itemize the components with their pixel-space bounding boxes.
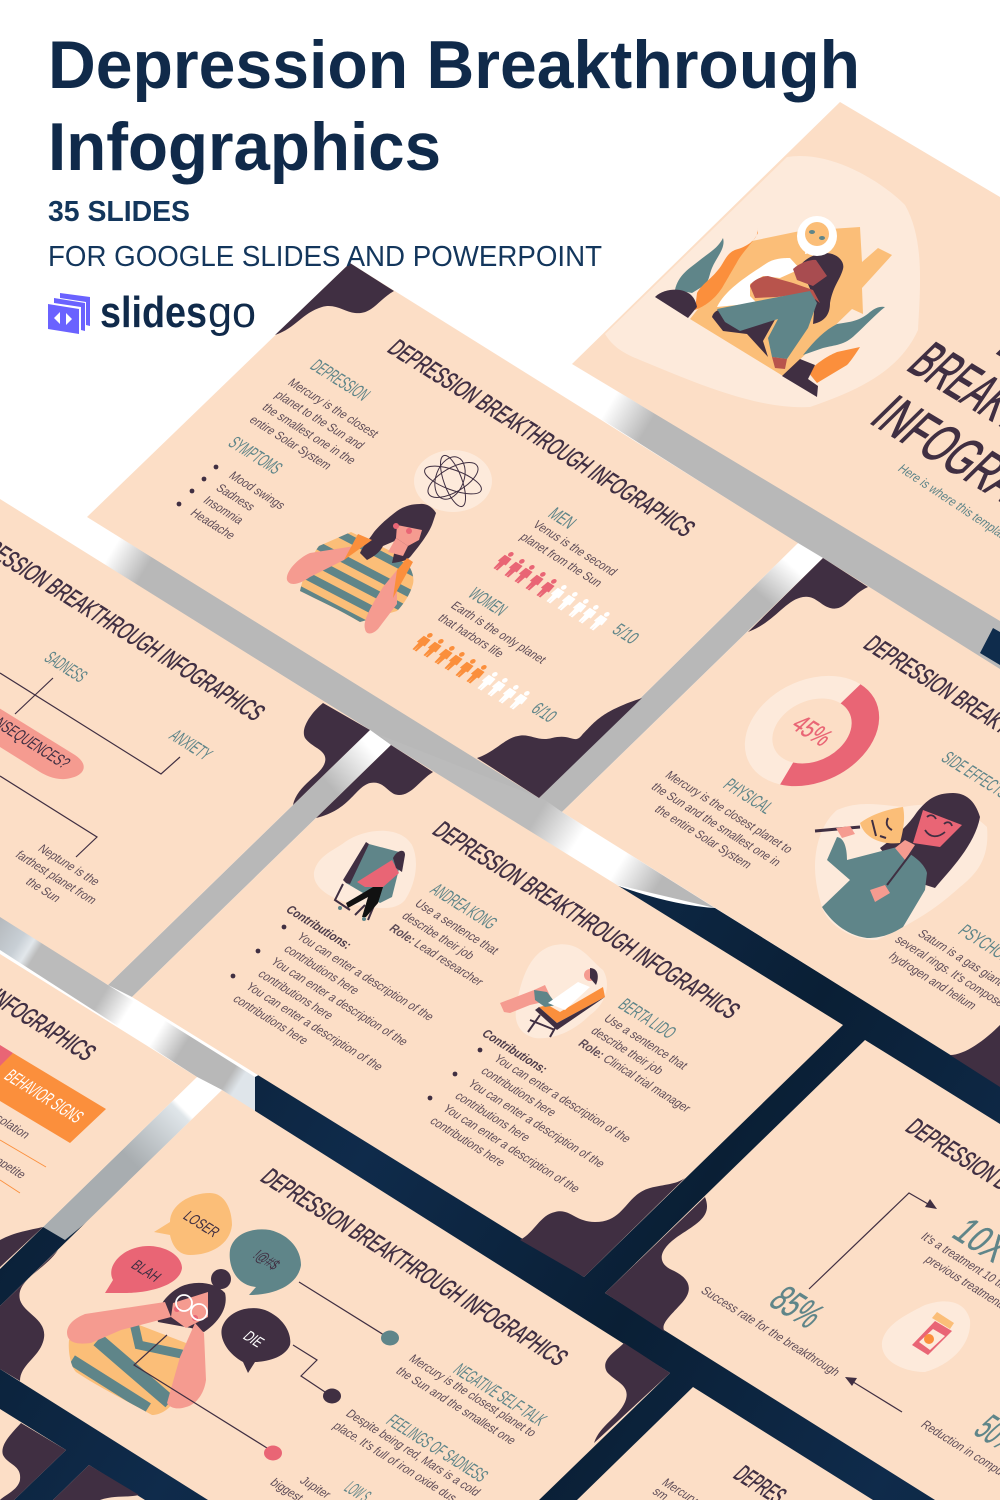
speech bubble: blah (105, 1246, 182, 1293)
text: neptune description: the Sun (23, 875, 64, 905)
stat: 85%: 85% (761, 1279, 833, 1335)
title second line: Infographics (48, 109, 441, 185)
shadow band between slides B and C (380, 735, 715, 908)
bullet list: symptoms: Insomnia (200, 493, 248, 527)
subtitle: slide count: 35 SLIDES (48, 196, 190, 228)
text: success rate: Success rate for the breakthrough (698, 1284, 844, 1379)
icon: tangled thought bubble (414, 450, 492, 512)
heading: women: WOMEN (464, 584, 512, 619)
shadow band below slide A (0, 500, 540, 798)
illustration: woman holding a mask (815, 793, 987, 940)
text: psychological description: hydrogen and helium (886, 949, 980, 1012)
panel: slide C team (132, 745, 843, 1277)
icon: slidesgo logo (48, 293, 90, 334)
node: pink dot (264, 1446, 282, 1460)
wave: bottom right (0, 1227, 43, 1267)
heading: negative self-talk: NEGATIVE SELF-TALK (449, 1360, 551, 1429)
text: Andrea contributions: Contributions: (283, 903, 355, 952)
speech bubble: loser (154, 1193, 232, 1255)
speech bubble: loser: LOSER (179, 1209, 223, 1241)
text: neptune description: farthest planet from (12, 848, 100, 907)
node: dark dot (323, 1388, 341, 1404)
stat: 5/10: 5/10 (608, 620, 644, 648)
donut chart: 45%: 45% (785, 711, 839, 752)
text: Berta description: Role: Clinical trial manager (575, 1036, 694, 1115)
panel: slide J bottom left (53, 1465, 145, 1500)
panel: cover slide (572, 102, 1000, 621)
title: Depression Breakthrough (48, 27, 860, 103)
text: Berta contributions: contributions here (478, 1064, 560, 1119)
text: Berta contributions: You can enter a description of the (465, 1077, 609, 1170)
heading: men: MEN (544, 504, 581, 532)
speech bubble: die (221, 1308, 290, 1373)
wave: bottom right (520, 1178, 685, 1277)
logo wordmark: go (208, 288, 256, 337)
illustration: stressed woman holding her head (67, 1269, 231, 1415)
text: Berta contributions (427, 1027, 635, 1208)
node: teal dot (381, 1330, 399, 1346)
text: Berta description: Use a sentence that (601, 1012, 691, 1072)
wave: bottom right (950, 1025, 1000, 1087)
text: Berta contributions: You can enter a description of the (491, 1052, 635, 1145)
panel: slide B physical and psychological (562, 558, 1000, 1087)
text: Berta description: describe their job (588, 1024, 667, 1077)
bullet list: symptoms: Mood swings (226, 469, 289, 512)
heading: depression: DEPRESSION (306, 356, 375, 404)
heading: slide title: DEPRESSION BREAKTHROUGH INFOGRAPHICS (381, 336, 700, 542)
text: Andrea contributions (230, 903, 438, 1086)
navy wedge at upper right (980, 628, 1000, 665)
heading: symptoms: SYMPTOMS (224, 433, 287, 478)
text: Andrea contributions: contributions here (255, 967, 337, 1022)
heading: physical: PHYSICAL (719, 775, 778, 817)
text: Berta contributions: contributions here (427, 1114, 509, 1169)
wave: top left (748, 558, 868, 632)
text: Andrea contributions: You can enter a description of the (243, 980, 387, 1073)
wave: right corner (594, 1343, 670, 1443)
heading: Berta Lido: BERTA LIDO (614, 995, 681, 1042)
heading: slide title: DEPRESSION BREAKTHROUGH INFOGRAPHICS (426, 818, 745, 1024)
text: neptune description: Neptune is the (35, 842, 104, 888)
icon: pill bottle (882, 1301, 970, 1372)
bullet list: symptoms (177, 465, 289, 549)
text: Berta contributions: Contributions: (479, 1027, 551, 1076)
arrow: to 85% (845, 1377, 902, 1412)
text: Andrea contributions: contributions here (281, 942, 363, 997)
text: depression description: the smallest one in the (259, 400, 360, 467)
pictogram chart: women 6 of 10 (410, 631, 533, 711)
illustration: Andrea Kong in a chair (314, 831, 416, 921)
panel: slide F consequences (0, 499, 370, 985)
speech bubble: symbols (230, 1229, 301, 1295)
speech bubble: die: DIE (239, 1329, 267, 1351)
illustration: sad woman in striped sweater (286, 504, 436, 634)
wave: top left (316, 745, 433, 818)
stat: 6/10: 6/10 (527, 699, 562, 726)
navy background region (0, 884, 1000, 1500)
text: feelings description: Despite being red, Mars is a cold (343, 1407, 484, 1499)
panel: slide K bottom left corner (0, 1409, 66, 1500)
text: physical description: Mercury is the closest planet to (662, 768, 796, 856)
text: Andrea description: describe their job (399, 909, 478, 962)
wave: top left (53, 1465, 139, 1500)
shadow band right of slide A (539, 543, 823, 812)
text: men description: Venus is the second (530, 518, 621, 578)
shadow band under cover slide (572, 364, 1000, 670)
shadow band between slides F and C (108, 730, 391, 997)
text: physical description: the entire Solar System (651, 802, 756, 871)
text: Andrea description: Use a sentence that (412, 897, 502, 957)
text: women description: Earth is the only planet (448, 599, 550, 666)
text: depression description: Mercury is the closest (285, 376, 382, 440)
orange header bar (0, 1053, 106, 1143)
bullet list: symptoms: Headache (187, 506, 239, 542)
text: negative self-talk description: Mercury is the closest planet to (406, 1352, 540, 1439)
bullet list: symptoms: Sadness (213, 481, 259, 514)
heading: anxiety: ANXIETY (165, 726, 217, 764)
text: depression description: entire Solar System (246, 413, 335, 472)
panel: slide D negative self-talk (0, 1090, 670, 1500)
subtitle: platforms: FOR GOOGLE SLIDES AND POWERPOINT (48, 241, 602, 273)
heading: Andrea Kong: ANDREA KONG (426, 880, 502, 933)
shadow band between slides E and D (43, 1077, 222, 1250)
connector lines (0, 673, 180, 857)
wave: left corner (0, 1250, 58, 1381)
heading: sadness: SADNESS (40, 648, 92, 686)
pictogram chart: men 5 of 10 (491, 550, 613, 632)
illustration: woman sitting in front of a house (655, 216, 892, 397)
text: Berta contributions: contributions here (452, 1089, 534, 1144)
text: physical description: the Sun and the smallest one in (648, 780, 785, 869)
shadow band below slide F (0, 915, 255, 1112)
pill: consequences (0, 690, 84, 779)
wave: top right (293, 703, 370, 805)
light blob behind cover illustration (605, 156, 920, 407)
panel: slide E behavior signs (0, 860, 197, 1269)
text: Berta contributions: You can enter a description of the (440, 1102, 584, 1195)
wave: top right (0, 1423, 66, 1500)
wave: bottom right (477, 698, 642, 798)
text: Andrea contributions: You can enter a description of the (294, 930, 438, 1023)
logo wordmark: slides (100, 288, 207, 337)
text: negative self-talk description: the Sun and the smallest one (393, 1364, 520, 1447)
pink header bar (0, 1045, 13, 1074)
wave: top left (275, 263, 394, 335)
panel: slide G statistics (605, 1040, 1000, 1500)
illustration: Berta Lido on a chaise (500, 944, 607, 1038)
panel: slide A depression and symptoms (87, 263, 798, 798)
text: Andrea contributions: You can enter a description of the (268, 955, 412, 1048)
text: Andrea contributions: contributions here (230, 992, 312, 1047)
text: men description: planet from the Sun (517, 530, 606, 590)
text: women description: that harbors life (435, 611, 508, 660)
heading: behavior signs: BEHAVIOR SIGNS (0, 1066, 88, 1127)
text: Andrea description: Role: Lead researcher (386, 921, 487, 988)
wave: left corner (605, 1197, 707, 1332)
panel: slide H bottom right (577, 1387, 873, 1500)
speech bubble: blah: BLAH (127, 1258, 164, 1285)
heading: slide title: DEPRESSION BREAKTHROUGH INFOGRAPHICS (254, 1165, 573, 1371)
arrow: to 10X (809, 1193, 937, 1289)
connector lines (134, 1282, 384, 1448)
text: depression description: planet to the Sun and (272, 388, 368, 452)
donut chart: 45% (736, 671, 888, 791)
speech bubble: symbols: !@#$ (249, 1248, 283, 1273)
